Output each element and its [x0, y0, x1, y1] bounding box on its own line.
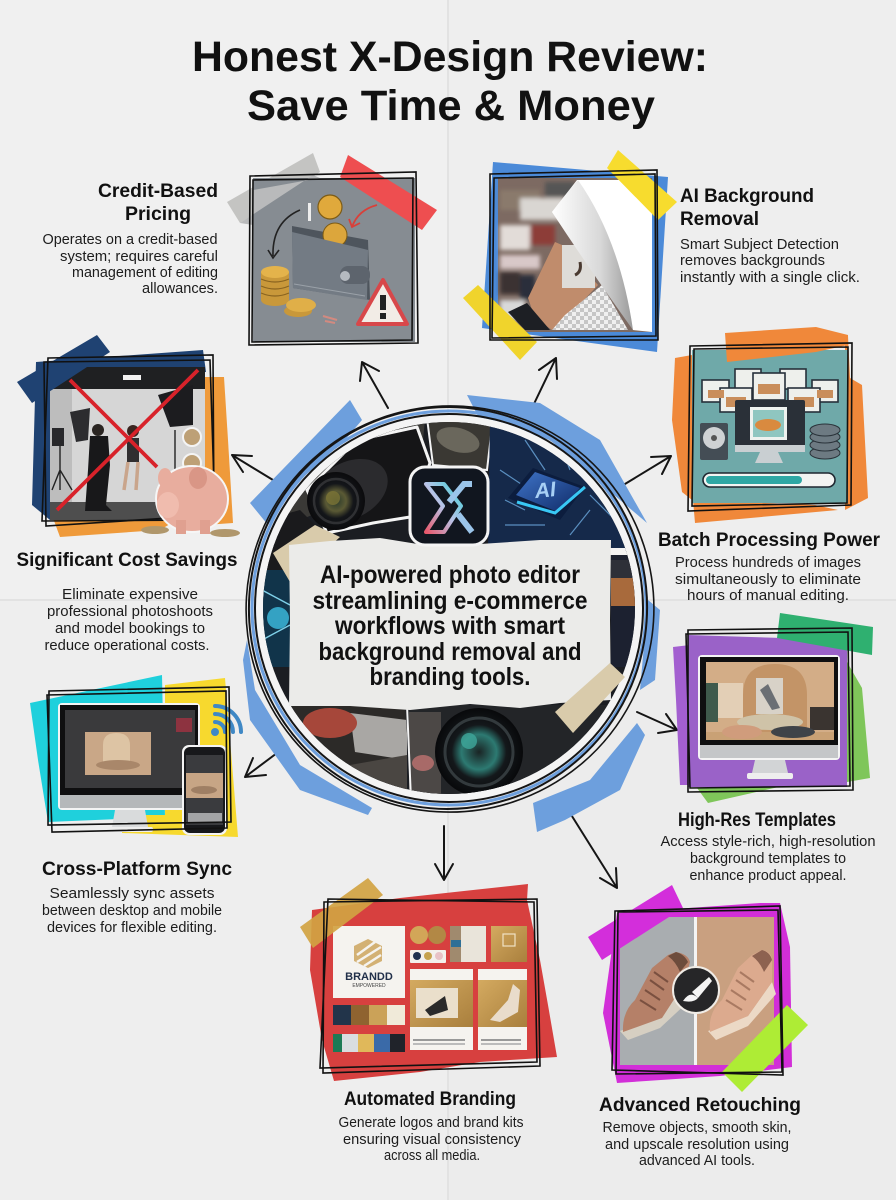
icon: piggy bank with coins	[141, 428, 240, 537]
description: removes backgrounds	[680, 253, 825, 269]
title: Honest X-Design Review:	[192, 33, 708, 81]
description: background templates to	[690, 851, 846, 867]
left blue streak photo	[263, 570, 290, 667]
heading	[680, 185, 814, 230]
heading: Cross-Platform Sync	[42, 858, 232, 880]
description: and upscale resolution using	[605, 1137, 789, 1153]
description: allowances.	[142, 281, 218, 297]
description: hours of manual editing.	[687, 588, 849, 604]
sketched rings	[193, 353, 707, 865]
paper note with tagline: background removal and	[318, 638, 582, 666]
lens photo top	[427, 418, 493, 470]
description: simultaneously to eliminate	[675, 572, 861, 588]
heading: High-Res Templates	[678, 809, 836, 831]
arrow: to credit-based pricing	[360, 362, 388, 408]
panel image: crossed-out studio and piggy bank	[17, 335, 240, 537]
bottom lens photo	[406, 705, 608, 794]
left shoe	[620, 952, 690, 1040]
description: management of editing	[72, 265, 218, 281]
heading: AI Background	[680, 185, 814, 207]
wallet	[292, 226, 370, 300]
panel: AI background removal	[463, 150, 860, 360]
X-Design logo	[410, 467, 488, 545]
description: instantly with a single click.	[680, 270, 860, 286]
arrow: to AI background removal	[532, 358, 557, 408]
description	[602, 1120, 792, 1169]
white removed area	[552, 180, 652, 332]
arrow: to automated branding	[435, 826, 453, 880]
model	[127, 425, 139, 437]
peeled flap	[552, 180, 633, 330]
arrow: to batch processing	[620, 456, 671, 487]
logo card	[333, 926, 405, 998]
description	[42, 886, 222, 936]
description: Access style-rich, high-resolution	[660, 834, 876, 850]
paper note with tagline: AI-powered photo editor	[320, 561, 580, 589]
description: Process hundreds of images	[675, 555, 861, 571]
arrow: to cross-platform sync	[245, 747, 285, 777]
heading	[98, 180, 218, 225]
central hub	[243, 395, 660, 832]
panel: credit-based pricing	[42, 153, 437, 345]
hand and product	[528, 242, 598, 330]
description	[680, 237, 860, 286]
photo collage: AI	[533, 478, 558, 503]
description: Eliminate expensive	[62, 587, 198, 603]
description: reduce operational costs.	[44, 638, 210, 654]
panel image: brand kit on red	[300, 878, 557, 1081]
heading: Credit-Based	[98, 180, 218, 202]
icon: wifi	[213, 706, 241, 734]
beige tape bottom right	[555, 663, 625, 733]
white ring	[256, 415, 642, 801]
thumbnails	[702, 369, 838, 412]
social post cards	[410, 969, 527, 1050]
heading: Pricing	[125, 203, 191, 225]
blue brush strokes	[243, 395, 660, 832]
beige tape top left	[273, 525, 340, 582]
right shoe	[708, 950, 776, 1040]
panel: high-res templates	[660, 613, 876, 884]
panel image: before and after shoes	[588, 885, 808, 1092]
arrows from centre to each feature	[232, 358, 677, 888]
AI chip photo	[488, 426, 626, 552]
description: ensuring visual consistency	[343, 1132, 522, 1148]
monitor	[698, 655, 840, 760]
description: Generate logos and brand kits	[338, 1115, 524, 1131]
warning triangle	[358, 280, 407, 324]
paper note with tagline: branding tools.	[370, 663, 530, 691]
description: across all media.	[384, 1148, 480, 1164]
hard drive	[700, 423, 728, 460]
flying coins and arrows	[318, 195, 342, 219]
panel: automated branding	[300, 878, 557, 1164]
description	[660, 834, 876, 884]
logo card: BRANDD	[345, 971, 393, 983]
description: between desktop and mobile	[42, 903, 222, 919]
heading: Removal	[680, 208, 759, 230]
arrow: to high-res templates	[637, 712, 677, 733]
photographer	[85, 436, 112, 511]
panel image: monitor showing template	[673, 613, 873, 803]
description	[338, 1115, 524, 1164]
paper note with tagline: workflows with smart	[334, 612, 566, 640]
database	[810, 424, 840, 459]
heading: Advanced Retouching	[599, 1094, 801, 1116]
description: advanced AI tools.	[639, 1153, 755, 1169]
description: Operates on a credit-based	[42, 232, 218, 248]
description	[44, 587, 213, 654]
camera on top	[302, 427, 430, 534]
coin stack	[261, 272, 289, 300]
panel image: desktop and phone	[30, 675, 241, 837]
icon: retouch brush	[673, 967, 719, 1013]
blurred store photo	[498, 178, 652, 332]
paper note with tagline: streamlining e-commerce	[312, 587, 588, 615]
title: Save Time & Money	[247, 82, 655, 130]
description: system; requires careful	[60, 249, 218, 265]
heading: Batch Processing Power	[658, 529, 880, 551]
panel image: hand with phone and peeled corner	[463, 150, 677, 360]
heading: Automated Branding	[344, 1088, 516, 1110]
logo card: EMPOWERED	[352, 983, 386, 989]
description: enhance product appeal.	[690, 868, 846, 884]
description: Seamlessly sync assets	[50, 886, 214, 902]
photo collage	[255, 415, 646, 805]
description: Remove objects, smooth skin,	[602, 1120, 792, 1136]
description: Smart Subject Detection	[680, 237, 839, 253]
description: professional photoshoots	[47, 604, 213, 620]
arrow: to advanced retouching	[560, 797, 617, 888]
monitor	[735, 400, 805, 452]
panel: advanced retouching	[588, 885, 808, 1169]
panel: cross-platform sync	[30, 675, 241, 936]
panel: batch processing power	[658, 327, 880, 604]
panel image: batch monitors and progress bar	[672, 327, 868, 523]
heading: Significant Cost Savings	[16, 549, 238, 571]
top-left background	[272, 424, 424, 550]
description: and model bookings to	[55, 621, 205, 637]
description	[42, 232, 218, 297]
bottom left hand photo	[291, 706, 407, 790]
paper note with tagline	[289, 538, 611, 710]
panel: significant cost savings	[16, 335, 240, 654]
arrow: to significant cost savings	[232, 455, 273, 480]
description: devices for flexible editing.	[47, 920, 217, 936]
description	[675, 555, 861, 604]
progress bar	[703, 473, 835, 487]
right orange photo	[611, 555, 635, 667]
panel image: wallet with coins and warning	[227, 153, 437, 345]
title	[192, 33, 708, 130]
